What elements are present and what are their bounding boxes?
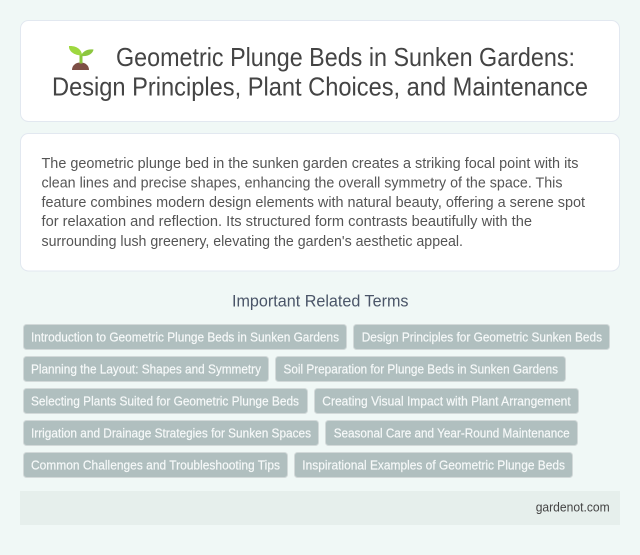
tag: design principles: Design Principles for Geometric Sunken Beds xyxy=(362,330,602,344)
tag: inspirational examples: Inspirational Examples of Geometric Plunge Beds xyxy=(302,458,565,472)
icon: seedling xyxy=(69,46,94,70)
tag: planning the layout xyxy=(24,356,268,382)
tag: irrigation and drainage: Irrigation and Drainage Strategies for Sunken Spaces xyxy=(31,426,311,440)
tag: introduction xyxy=(24,324,346,350)
tag: soil preparation xyxy=(276,356,566,382)
footer bar xyxy=(20,491,620,525)
tag: common challenges: Common Challenges and Troubleshooting Tips xyxy=(31,458,280,472)
panel: title card xyxy=(20,20,620,122)
description paragraph: feature combines modern design elements with natural beauty, offering a serene spot xyxy=(42,194,586,211)
tag: seasonal care xyxy=(326,420,578,446)
tag: soil preparation: Soil Preparation for Plunge Beds in Sunken Gardens xyxy=(284,362,558,376)
tag: seasonal care: Seasonal Care and Year-Round Maintenance xyxy=(334,426,570,440)
tag: irrigation and drainage xyxy=(24,420,318,446)
description paragraph xyxy=(42,155,586,250)
tag: introduction: Introduction to Geometric Plunge Beds in Sunken Gardens xyxy=(31,330,339,344)
tag: visual impact xyxy=(314,388,578,414)
panel: description card xyxy=(20,134,620,271)
description paragraph: surrounding lush greenery, elevating the garden's aesthetic appeal. xyxy=(42,233,463,250)
title text xyxy=(52,42,588,102)
tag: selecting plants xyxy=(24,388,308,414)
tag: selecting plants: Selecting Plants Suited for Geometric Plunge Beds xyxy=(31,394,299,408)
heading: important related terms: Important Related Terms xyxy=(232,292,408,310)
panel: related terms tags xyxy=(24,324,610,478)
description paragraph: The geometric plunge bed in the sunken garden creates a striking focal point with its xyxy=(42,155,578,172)
title text: Geometric Plunge Beds in Sunken Gardens: xyxy=(116,42,575,72)
tag: common challenges xyxy=(24,452,288,478)
footer bar: gardenot.com xyxy=(536,500,610,515)
description paragraph: for relaxation and reflection. Its structured form contrasts beautifully with the xyxy=(42,213,532,230)
tag: planning the layout: Planning the Layout: Shapes and Symmetry xyxy=(31,362,261,376)
tag: inspirational examples xyxy=(294,452,572,478)
tag: design principles xyxy=(354,324,610,350)
tag: visual impact: Creating Visual Impact with Plant Arrangement xyxy=(322,394,571,408)
title text: Design Principles, Plant Choices, and Maintenance xyxy=(52,72,588,102)
description paragraph: clean lines and precise shapes, enhancing the overall symmetry of the space. This xyxy=(42,174,562,191)
